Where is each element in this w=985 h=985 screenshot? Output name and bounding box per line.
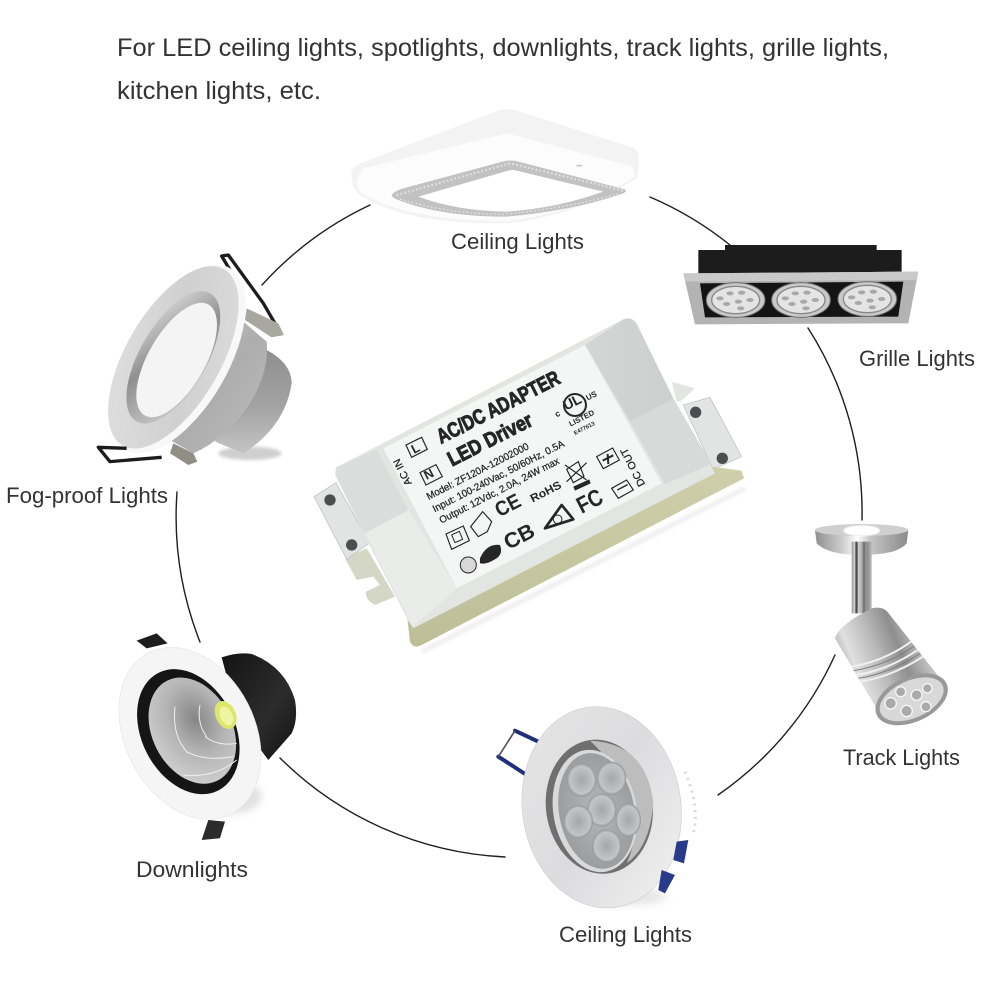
driver shadow xyxy=(420,487,747,653)
label title: AC/DC ADAPTER xyxy=(433,366,564,448)
certification marks: FC xyxy=(572,483,607,518)
certification marks: UL xyxy=(560,390,584,413)
heading: For LED ceiling lights, spotlights, downlights, track lights, grille lights, xyxy=(117,34,889,62)
label specs: DC OUT xyxy=(619,445,648,488)
LED driver adapter xyxy=(314,318,747,653)
icon: recessed ceiling light with blue clips xyxy=(498,696,695,918)
label specs: Output: 12Vdc, 2.0A, 24W max xyxy=(438,456,561,526)
heading xyxy=(117,34,889,105)
certification marks: E477613 xyxy=(573,421,596,437)
label: fog-proof lights: Fog-proof Lights xyxy=(6,483,168,508)
clip wire back xyxy=(222,255,282,335)
connecting ring xyxy=(176,197,862,857)
mounting tabs xyxy=(314,382,742,605)
product label: L xyxy=(409,441,422,457)
label: grille lights: Grille Lights xyxy=(859,346,975,371)
product label xyxy=(383,345,662,588)
certification marks: US xyxy=(584,389,599,402)
certification marks: RoHS xyxy=(529,479,564,505)
label specs xyxy=(392,439,648,526)
icon: square ceiling light xyxy=(351,109,639,223)
icon: fog-proof downlight xyxy=(81,243,292,475)
label: ceiling lights: Ceiling Lights xyxy=(451,229,584,254)
heading: kitchen lights, etc. xyxy=(117,77,321,105)
icon: grille light xyxy=(683,245,918,324)
driver base xyxy=(407,467,744,647)
certification marks: CE xyxy=(491,489,525,522)
end caps xyxy=(336,318,712,627)
certification marks xyxy=(446,389,607,573)
label specs: Input: 100-240Vac, 50/60Hz, 0.5A xyxy=(431,439,567,515)
label specs: Model: ZF120A-12002000 xyxy=(425,441,531,503)
label: ceiling lights bottom: Ceiling Lights xyxy=(559,922,692,947)
label title: LED Driver xyxy=(444,409,537,471)
label: downlights: Downlights xyxy=(136,857,248,882)
label: track lights: Track Lights xyxy=(843,745,960,770)
label specs: AC IN xyxy=(392,457,415,487)
label title xyxy=(433,366,564,471)
terminal markings xyxy=(406,437,633,498)
icon: COB downlight xyxy=(91,623,296,844)
driver cover xyxy=(335,318,715,628)
product label: N xyxy=(422,466,436,483)
certification marks: CB xyxy=(500,519,539,554)
certification marks: c xyxy=(553,408,562,419)
certification marks: LISTED xyxy=(567,408,596,428)
icon: track light xyxy=(815,524,956,736)
